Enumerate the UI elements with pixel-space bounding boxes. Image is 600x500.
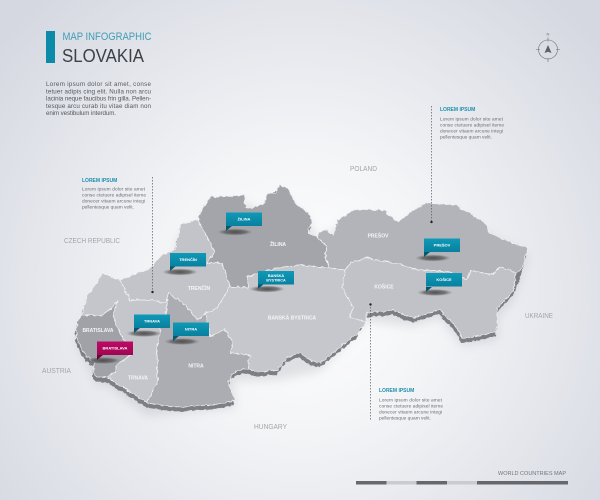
pin: Kosice [417, 273, 462, 296]
pin: Bratislava [85, 342, 133, 364]
region: Zilina [198, 185, 330, 287]
region: Trencin [120, 220, 230, 320]
callout: left: donecer vitaem arcune integi [82, 198, 145, 204]
region: Nitra [147, 293, 250, 407]
callout: bottom: donecer vitaem arcune integi [379, 410, 442, 416]
region: Bratislava [76, 300, 133, 377]
callout: right: pellentesque quam velit. [440, 134, 492, 140]
pin: Banska Bystrica: BYSTRICA [266, 278, 286, 282]
intro text block: enim vestibulum interdum. [46, 110, 116, 117]
country labels [42, 166, 553, 431]
callout: right: donecer vitaem arcune integi [440, 128, 503, 134]
intro text block [46, 81, 152, 117]
callout: bottom: pellentesque quam velit. [379, 416, 431, 422]
callout: left: pellentesque quam velit. [82, 204, 134, 210]
country labels: CZECH REPUBLIC [64, 238, 120, 245]
callout: left [82, 177, 154, 293]
country labels: POLAND [350, 166, 377, 173]
callout: right [430, 106, 504, 223]
callout: bottom: LOREM IPSUM [379, 388, 414, 394]
icon: compass: N [547, 32, 550, 36]
title accent bar [46, 31, 55, 63]
pin: Kosice: KOŠICE [436, 277, 452, 282]
icon: compass [536, 32, 560, 62]
region labels: ŽILINA [270, 240, 286, 248]
region labels: PREŠOV [368, 232, 389, 240]
region labels: BRATISLAVA [82, 328, 114, 334]
pin: Presov [415, 238, 460, 262]
map of Slovakia [75, 185, 528, 416]
callout: bottom [369, 303, 443, 422]
pin: Bratislava: BRATISLAVA [103, 346, 128, 350]
callout: right: Lorem ipsum dolor site amet [440, 116, 504, 122]
region: Banska Bystrica [205, 265, 367, 372]
callout: left: LOREM IPSUM [82, 178, 117, 184]
callout: bottom: Lorem ipsum dolor site amet [379, 398, 443, 404]
intro text block: Lorem ipsum dolor sit amet, conse [46, 81, 152, 88]
pin: Nitra [164, 322, 209, 345]
region labels: TRENČÍN [188, 284, 210, 292]
pin: Zilina [217, 212, 262, 236]
intro text block: lacinia neque faucibus frin gilla. Pellen- [46, 96, 151, 103]
region labels: TRNAVA [128, 376, 148, 382]
pin: Banska Bystrica: BANSKÁ [268, 273, 284, 278]
map soft shadow [76, 193, 528, 416]
region labels: BANSKÁ BYSTRICA [268, 314, 317, 322]
callout: left: conse ctetuere adipisel iteme [82, 192, 146, 198]
callout: right: conse ctetuere adipisel iteme [440, 122, 504, 128]
region labels [82, 232, 394, 382]
footer bar [356, 481, 568, 484]
pin: Trnava [126, 314, 170, 337]
pin: Banska Bystrica [249, 271, 294, 292]
callout: right: LOREM IPSUM [440, 107, 475, 113]
country labels: UKRAINE [525, 313, 553, 320]
pin: Trencin [162, 253, 206, 276]
callout: left: Lorem ipsum dolor site amet [82, 186, 146, 192]
pin: Trencin: TRENČÍN [179, 257, 197, 262]
country labels: HUNGARY [254, 424, 287, 431]
intro text block: tesque arcu curab itu vitae diam non [46, 103, 152, 110]
footer label: WORLD COUNTRIES MAP [498, 471, 566, 477]
region labels: KOŠICE [374, 282, 394, 290]
map extruded edge [75, 190, 527, 412]
region: Kosice [342, 258, 516, 338]
region: Trnava [82, 273, 167, 403]
region: Presov [318, 203, 528, 280]
title: SLOVAKIA [62, 45, 145, 66]
region labels: NITRA [188, 364, 204, 370]
country labels: AUSTRIA [42, 368, 71, 375]
subtitle: MAP INFOGRAPHIC [62, 31, 152, 43]
callout: bottom: conse ctetuere adipisel iteme [379, 404, 443, 410]
pin: Zilina: ŽILINA [238, 216, 251, 222]
pin: Nitra: NITRA [185, 326, 197, 332]
pin: Presov: PREŠOV [434, 242, 451, 248]
pin: Trnava: TRNAVA [144, 318, 160, 324]
intro text block: tetuer adipis cing elit. Nulla non arcu [46, 88, 152, 95]
